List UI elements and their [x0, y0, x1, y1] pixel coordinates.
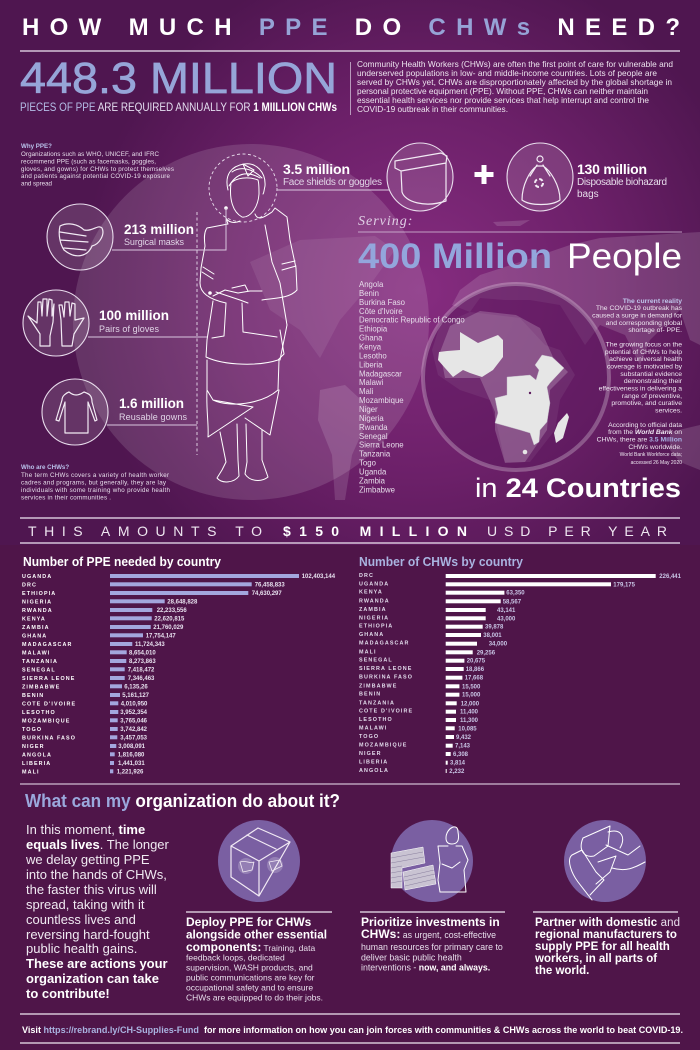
- bar chart: PPE needed by country: 76,458,833: [255, 582, 285, 588]
- bar chart: CHWs by country: MALI: [359, 649, 377, 655]
- call to action paragraph: to contribute!: [26, 986, 110, 1001]
- why PPE text: Organizations such as WHO, UNICEF, and IFRC: [21, 151, 160, 158]
- bar chart: PPE needed by country: 8,654,010: [129, 650, 156, 656]
- stat: biohazard bags: Disposable biohazard: [577, 177, 667, 188]
- headline statistic: PIECES OF PPE ARE REQUIRED ANNUALLY FOR 1 MIILLION CHWs: [20, 102, 337, 114]
- bar chart: PPE needed by country: 3,457,053: [120, 735, 148, 741]
- intro paragraph: underserved populations in low- and middle-income countries. Lots of people are: [357, 68, 657, 78]
- bar chart: CHWs by country: DRC: [359, 573, 374, 579]
- stat: gloves: 100 million: [99, 308, 169, 323]
- bar chart: CHWs by country: SIERRA LEONE: [359, 666, 412, 672]
- country list: Zambia: [359, 476, 386, 486]
- intro paragraph: essential health services nor provide services that help interrupt and control the: [357, 95, 649, 105]
- call to action paragraph: These are actions your: [26, 956, 168, 971]
- bar chart: CHWs by country: ETHIOPIA: [359, 624, 393, 630]
- country list: Democratic Republic of Congo: [359, 316, 465, 325]
- call to action paragraph: organization can take: [26, 971, 159, 986]
- country list: Malawi: [359, 378, 384, 387]
- current reality text: According to official data: [608, 422, 682, 429]
- stat: surgical masks: [124, 222, 194, 247]
- bar chart: PPE needed by country: NIGERIA: [22, 599, 52, 605]
- bar chart: CHWs by country: MADAGASCAR: [359, 641, 410, 647]
- section heading: What can my organization do about it?: [25, 791, 340, 811]
- bar chart: CHWs by country: 29,256: [477, 650, 496, 656]
- bar chart: CHWs by country: 15,500: [462, 684, 481, 690]
- bar chart: PPE needed by country: ZAMBIA: [22, 625, 50, 631]
- bar chart: CHWs by country: 11,400: [460, 710, 479, 716]
- bar chart: CHWs by country: 17,668: [465, 676, 484, 682]
- current reality text: World Bank Workforce data;: [620, 452, 682, 458]
- action: partner with manufacturers: supply PPE for all health: [535, 941, 670, 953]
- why PPE text: and spread: [21, 180, 53, 188]
- action: deploy PPE: [186, 915, 327, 1002]
- country list: Uganda: [359, 468, 387, 476]
- current reality text: CHWs worldwide.: [628, 444, 682, 451]
- headline statistic: 448.3 MILLION: [20, 54, 337, 103]
- bar chart: PPE needed by country: 3,952,354: [120, 710, 148, 716]
- who are CHWs text: individuals with some training who provide health: [21, 487, 171, 494]
- bar chart: CHWs by country: 63,350: [506, 591, 525, 597]
- country list: Ghana: [359, 334, 383, 343]
- bar chart: PPE needed by country: BURKINA FASO: [22, 735, 76, 741]
- bar chart: CHWs by country: 11,300: [460, 718, 479, 724]
- action: partner with manufacturers: Partner with domestic and: [535, 917, 680, 929]
- stat: gowns: [119, 396, 188, 422]
- bar chart: PPE needed by country: 102,403,144: [302, 574, 336, 580]
- icon: partnering hands: [564, 820, 646, 902]
- current reality text: potential of CHWs to help: [605, 349, 682, 356]
- bar chart: CHWs by country: 34,000: [489, 642, 508, 648]
- icon: surgical mask: [47, 204, 113, 270]
- who are CHWs text: services in their communities .: [21, 494, 111, 502]
- bar chart: CHWs by country: 3,814: [450, 761, 466, 767]
- bar chart: CHWs by country: UGANDA: [359, 581, 389, 587]
- bar chart: PPE needed by country: DRC: [22, 582, 37, 588]
- action: partner with manufacturers: [534, 917, 680, 977]
- stat: gowns: Reusable gowns: [119, 412, 188, 422]
- intro paragraph: Community Health Workers (CHWs) are often the first point of care for vulnerable and: [357, 59, 673, 69]
- bar chart: CHWs by country: SENEGAL: [359, 658, 393, 664]
- bar chart: PPE needed by country: 7,346,463: [128, 676, 155, 682]
- call to action paragraph: reversing hard-fought: [26, 927, 150, 942]
- stat: surgical masks: 213 million: [124, 222, 194, 237]
- leader lines: [88, 190, 389, 425]
- why PPE text: Why PPE?: [21, 143, 52, 150]
- country list: Zimbabwe: [359, 485, 395, 494]
- country list: Ethiopia: [359, 325, 388, 334]
- call to action paragraph: we delay getting PPE: [25, 852, 150, 867]
- stat: face shields: 3.5 million: [283, 161, 350, 177]
- country list: Rwanda: [359, 423, 388, 432]
- bar chart: CHWs by country: 6,308: [453, 752, 469, 758]
- country list: Senegal: [359, 432, 388, 441]
- why PPE text: recommend PPE (such as facemasks, goggles,: [21, 158, 156, 166]
- current reality text: services.: [655, 408, 682, 414]
- call to action paragraph: spread, taking with it: [26, 897, 145, 912]
- icon: face shield: [387, 143, 453, 211]
- headline: in 24 countries: in 24 Countries: [475, 473, 681, 503]
- headline: 400 million people: People: [567, 237, 682, 276]
- country list: Lesotho: [359, 351, 387, 360]
- call to action paragraph: In this moment, time: [26, 822, 145, 837]
- current reality text: The current reality: [623, 298, 682, 305]
- country list: [359, 280, 465, 494]
- bar chart: CHWs by country: TANZANIA: [359, 700, 395, 706]
- cost banner: [20, 518, 680, 543]
- bar chart: PPE needed by country: 3,742,842: [120, 727, 148, 733]
- bar chart: CHWs by country: RWANDA: [359, 598, 390, 604]
- bar chart: PPE needed by country: [22, 574, 336, 775]
- country list: Liberia: [359, 360, 383, 369]
- bar chart: PPE needed by country: MADAGASCAR: [22, 642, 73, 648]
- country list: Angola: [359, 280, 384, 289]
- bar chart: CHWs by country: 226,441: [659, 574, 682, 580]
- current reality text: CHWs, there are 3.5 Million: [597, 436, 682, 444]
- country list: Mozambique: [359, 396, 404, 405]
- stat: biohazard bags: [577, 161, 667, 200]
- country list: Nigeria: [359, 414, 384, 423]
- stat: face shields: [283, 161, 382, 188]
- bar chart: CHWs by country: GHANA: [359, 632, 384, 638]
- action: partner with manufacturers: the world.: [535, 965, 589, 977]
- bar chart: PPE needed by country: 28,648,828: [167, 599, 198, 605]
- headline: 400 million people: [358, 237, 682, 276]
- bar chart: CHWs by country: 10,085: [458, 726, 477, 732]
- who are CHWs text: The term CHWs covers a variety of health worker: [21, 472, 169, 479]
- bar chart: PPE needed by country: 17,754,147: [146, 633, 176, 639]
- community health worker figure: [197, 154, 297, 482]
- bar chart: CHWs by country: NIGERIA: [359, 615, 389, 621]
- icon: PPE box: [218, 820, 300, 902]
- country list: Mali: [359, 387, 374, 396]
- bar chart: PPE needed by country: 6,135,26: [124, 684, 148, 690]
- country list: Benin: [359, 289, 379, 298]
- country list: Kenya: [359, 342, 382, 352]
- title: HOW MUCH PPE DO CHWs NEED?: [22, 14, 680, 41]
- bar chart: PPE needed by country: BENIN: [22, 693, 44, 699]
- call to action paragraph: public health gains.: [26, 941, 137, 956]
- cost banner: $150 MILLION: [283, 523, 467, 539]
- call to action paragraph: [25, 822, 170, 1001]
- bar chart: CHWs by country: TOGO: [359, 734, 379, 740]
- bar chart: CHWs by country: COTE D'IVOIRE: [359, 709, 413, 715]
- current reality text: coverage is motivated by: [607, 364, 683, 370]
- plus sign: [474, 165, 494, 184]
- stat: face shields: Face shields or goggles: [283, 177, 382, 188]
- bar chart: PPE needed by country: 5,161,127: [122, 693, 150, 699]
- action: prioritize investments: Prioritize investments in: [361, 915, 500, 929]
- country list: Tanzania: [359, 450, 391, 459]
- country list: Niger: [359, 405, 378, 414]
- bar chart: CHWs by country: BENIN: [359, 692, 381, 698]
- bar chart: CHWs by country: ZIMBABWE: [359, 683, 397, 689]
- bar chart: CHWs by country: 43,141: [497, 608, 516, 614]
- bar chart: PPE needed by country: MOZAMBIQUE: [22, 718, 70, 724]
- bar chart: PPE needed by country: KENYA: [22, 616, 46, 622]
- bar chart: PPE needed by country: NIGER: [22, 744, 45, 750]
- bar chart: CHWs by country: 7,143: [455, 744, 471, 750]
- country list: Togo: [359, 459, 377, 468]
- current reality text: demonstrating their: [624, 378, 683, 385]
- headline: 400 million people: 400 Million: [358, 237, 552, 276]
- cost banner: THIS AMOUNTS TO: [28, 523, 262, 539]
- cost banner: USD PER YEAR: [487, 523, 667, 539]
- call to action paragraph: equals lives. The longer: [26, 837, 170, 852]
- bar chart: PPE needed by country: COTE D'IVOIRE: [22, 701, 76, 707]
- bar chart: PPE needed by country: UGANDA: [22, 574, 52, 580]
- action: partner with manufacturers: workers, in all parts of: [534, 953, 657, 965]
- Africa map in circle: [423, 284, 609, 470]
- bar chart: CHWs by country: MOZAMBIQUE: [359, 743, 407, 749]
- bar chart: PPE needed by country: GHANA: [22, 633, 47, 639]
- stat: gloves: Pairs of gloves: [99, 324, 160, 334]
- bar chart: PPE needed by country: 8,273,863: [129, 659, 156, 665]
- who are CHWs text: Who are CHWs?: [21, 464, 69, 471]
- action: deploy PPE: feedback loops, dedicated: [186, 952, 285, 962]
- bar chart: CHWs by country: 9,432: [456, 735, 472, 741]
- bar chart: PPE needed by country: 1,441,031: [118, 761, 145, 767]
- bar chart: PPE needed by country: 22,233,556: [157, 608, 187, 614]
- current reality text: from the World Bank on: [608, 429, 682, 436]
- stat: gloves: [99, 308, 169, 334]
- bar chart: PPE needed by country: TOGO: [22, 727, 42, 733]
- bar chart: CHWs by country: 15,000: [462, 693, 481, 699]
- serving label: Serving:: [358, 214, 413, 229]
- bar chart: PPE needed by country: LESOTHO: [22, 710, 56, 716]
- call to action paragraph: countless lives and: [26, 912, 136, 927]
- bar chart: PPE needed by country: 1,816,080: [118, 752, 145, 758]
- world map: [250, 220, 700, 500]
- bar chart: CHWs by country: ANGOLA: [359, 768, 389, 774]
- bar chart: PPE needed by country: 3,008,091: [118, 744, 146, 750]
- bar chart: PPE needed by country: MALI: [22, 769, 40, 775]
- current reality text: promotive, and curative: [611, 400, 682, 407]
- bar chart: PPE needed by country: 3,765,046: [120, 718, 148, 724]
- bar chart: PPE needed by country: RWANDA: [22, 608, 53, 614]
- country list: Côte d'Ivoire: [359, 307, 403, 316]
- action: prioritize investments: interventions - now, and always.: [361, 962, 490, 972]
- bar chart: PPE needed by country: ANGOLA: [22, 752, 52, 758]
- action: deploy PPE: Deploy PPE for CHWs: [186, 915, 312, 929]
- current reality text: range of preventive,: [622, 393, 682, 400]
- action: deploy PPE: occupational safety and to ensure: [186, 982, 313, 992]
- bar chart: PPE needed by country: 74,630,297: [252, 591, 282, 597]
- bar chart: CHWs by country: LESOTHO: [359, 717, 393, 723]
- bar chart: PPE needed by country: 11,724,343: [135, 642, 165, 648]
- action: prioritize investments: CHWs: as urgent, cost-effective: [361, 927, 496, 941]
- bar chart: CHWs by country: [359, 573, 682, 775]
- action: prioritize investments: [361, 915, 503, 972]
- bar chart: CHWs by country: NIGER: [359, 751, 382, 757]
- footer link text: Visit https://rebrand.ly/CH-Supplies-Fund for more information on how you can join forces with communities & CHWs across the world to beat COVID-19.: [22, 1025, 683, 1036]
- icon: gown: [42, 379, 108, 445]
- bar chart: CHWs by country: 39,878: [485, 625, 504, 631]
- bar chart: PPE needed by country: LIBERIA: [22, 761, 51, 767]
- action: deploy PPE: supervision, WASH products, and: [186, 962, 313, 972]
- action: deploy PPE: components: Training, data: [186, 940, 315, 954]
- bar chart: CHWs by country: 12,000: [461, 701, 480, 707]
- country list: Burkina Faso: [359, 298, 406, 307]
- chart heading: CHWs by country: Number of CHWs by country: [359, 555, 523, 569]
- country list: Madagascar: [359, 369, 402, 378]
- current reality text: effectiveness in delivering a: [599, 386, 682, 392]
- stat: surgical masks: Surgical masks: [124, 237, 184, 247]
- bar chart: PPE needed by country: 22,620,815: [154, 616, 185, 622]
- call to action paragraph: the faster this virus will: [26, 882, 157, 897]
- action: deploy PPE: alongside other essential: [186, 928, 327, 942]
- bar chart: PPE needed by country: 4,010,950: [121, 701, 148, 707]
- intro paragraph: [357, 59, 673, 114]
- chart heading: PPE by country: Number of PPE needed by country: [23, 555, 221, 569]
- bar chart: CHWs by country: MALAWI: [359, 725, 387, 731]
- action: prioritize investments: deliver basic public health: [361, 952, 462, 962]
- action: deploy PPE: CHWs are equipped to do their jobs.: [186, 992, 323, 1002]
- action: deploy PPE: public communications are key for: [186, 972, 315, 982]
- bar chart: PPE needed by country: 1,221,926: [117, 769, 144, 775]
- bar chart: CHWs by country: ZAMBIA: [359, 607, 387, 613]
- intro paragraph: served by CHWs yet, CHWs are disproportionately affected by the global shortage in: [357, 77, 672, 87]
- bar chart: CHWs by country: 38,001: [483, 633, 502, 639]
- bar chart: CHWs by country: 179,175: [613, 582, 636, 588]
- current reality text: caused a surge in demand for: [592, 312, 683, 320]
- current reality text: accessed 26 May 2020: [631, 460, 682, 466]
- stat: gowns: 1.6 million: [119, 396, 184, 411]
- bar chart: PPE needed by country: 21,760,029: [153, 625, 184, 631]
- why PPE text: and patients against potential COVID-19 exposure: [21, 173, 171, 180]
- bar chart: CHWs by country: KENYA: [359, 590, 383, 596]
- bar chart: PPE needed by country: 7,418,472: [128, 667, 155, 673]
- bar chart: PPE needed by country: ZIMBABWE: [22, 684, 60, 690]
- stat: biohazard bags: bags: [577, 189, 599, 200]
- bar chart: CHWs by country: BURKINA FASO: [359, 675, 413, 681]
- action: prioritize investments: human resources for primary care to: [361, 942, 503, 952]
- bar chart: CHWs by country: 20,675: [467, 659, 486, 665]
- current reality text: substantial evidence: [620, 371, 682, 378]
- current reality text: and corresponding global: [606, 320, 682, 327]
- why PPE text: [21, 143, 174, 188]
- intro paragraph: COVID-19 outbreak in their communities.: [357, 104, 508, 114]
- bar chart: CHWs by country: 18,866: [466, 667, 485, 673]
- icon: biohazard bag: [507, 143, 573, 211]
- bar chart: PPE needed by country: SIERRA LEONE: [22, 676, 75, 682]
- current reality text: The growing focus on the: [606, 342, 682, 348]
- intro paragraph: personal protective equipment (PPE). Without PPE, CHWs can neither maintain: [357, 86, 648, 96]
- who are CHWs text: [21, 464, 171, 502]
- current reality text: The COVID-19 outbreak has: [596, 305, 683, 312]
- who are CHWs text: cadres and programs, but generally, they are lay: [21, 480, 167, 486]
- current reality text: [592, 298, 683, 466]
- call to action paragraph: into the hands of CHWs,: [26, 867, 167, 882]
- bar chart: PPE needed by country: ETHIOPIA: [22, 591, 56, 597]
- bar chart: CHWs by country: 2,232: [449, 769, 465, 775]
- bar chart: CHWs by country: 58,567: [503, 599, 522, 605]
- bar chart: CHWs by country: LIBERIA: [359, 760, 388, 766]
- bar chart: PPE needed by country: MALAWI: [22, 650, 50, 656]
- current reality text: shortage of- PPE.: [628, 327, 682, 334]
- bar chart: CHWs by country: 43,000: [497, 616, 516, 622]
- current reality text: achieve universal health: [609, 356, 682, 363]
- big background circle: [73, 144, 429, 500]
- country list: Sierra Leone: [359, 441, 404, 450]
- icon: gloves: [23, 290, 89, 356]
- bar chart: PPE needed by country: SENEGAL: [22, 667, 56, 673]
- bar chart: PPE needed by country: TANZANIA: [22, 659, 58, 665]
- action: partner with manufacturers: regional manufacturers to: [535, 929, 677, 941]
- icon: money and worker: [391, 820, 473, 902]
- stat: biohazard bags: 130 million: [577, 161, 647, 177]
- why PPE text: gloves, and gowns) for CHWs to protect themselves: [21, 166, 174, 173]
